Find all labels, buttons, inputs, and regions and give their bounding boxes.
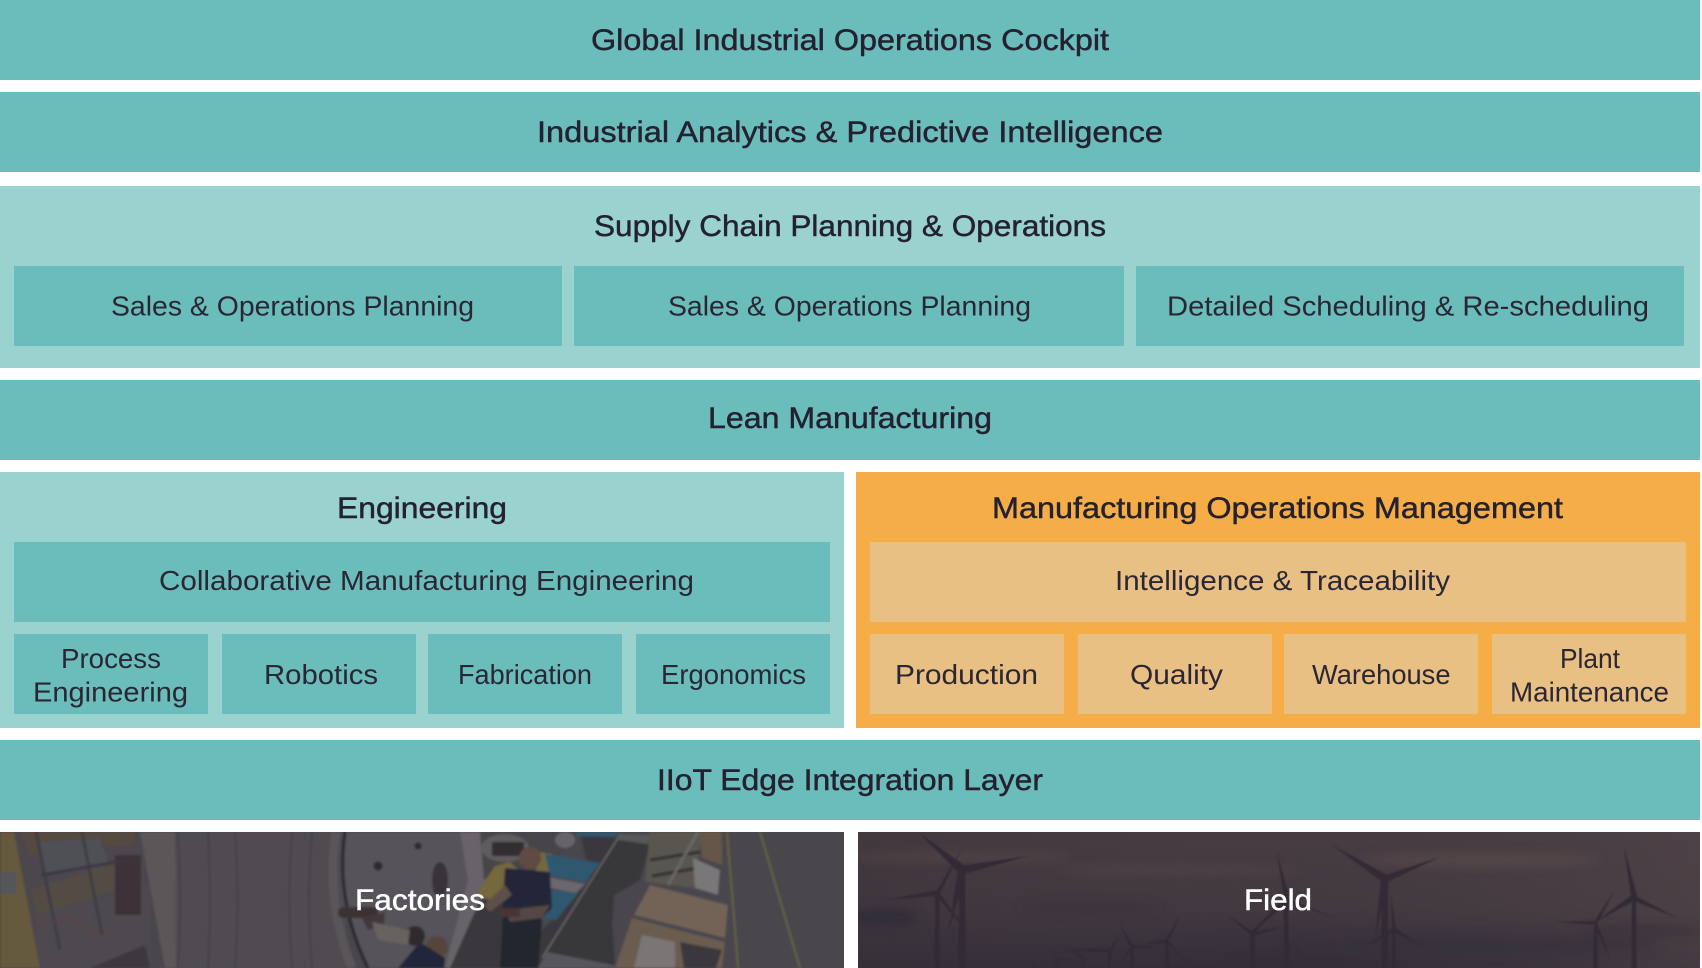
box: Warehouse: Warehouse <box>1312 659 1450 690</box>
heading: supply chain: Supply Chain Planning & Operations <box>594 210 1106 243</box>
box: Production: Production <box>895 659 1038 690</box>
label: Field: Field <box>1244 884 1312 917</box>
box: Production <box>870 634 1064 714</box>
bar: IIoT Edge Integration Layer <box>0 740 1700 820</box>
turbine 6 <box>1374 902 1409 954</box>
box: Process Engineering: Engineering <box>33 676 188 708</box>
box: Sales & Operations Planning (2) <box>574 266 1124 346</box>
heading: manufacturing operations management: Manufacturing Operations Management <box>992 492 1564 525</box>
box: Sales & Operations Planning (1): Sales & Operations Planning <box>111 290 474 322</box>
box: Process Engineering: Process <box>61 643 161 674</box>
box: Collaborative Manufacturing Engineering <box>14 542 830 622</box>
wind turbines <box>885 832 1677 968</box>
box: Quality: Quality <box>1130 659 1223 690</box>
box: Robotics <box>222 634 416 714</box>
bar: Lean Manufacturing <box>0 380 1700 460</box>
bar: Industrial Analytics & Predictive Intelligence: Industrial Analytics & Predictive Intelligence <box>537 116 1163 149</box>
turbine 2 <box>896 854 958 948</box>
box: Robotics: Robotics <box>264 659 378 690</box>
bar: IIoT Edge Integration Layer: IIoT Edge Integration Layer <box>657 764 1043 797</box>
box: Sales & Operations Planning (2): Sales & Operations Planning <box>668 290 1031 322</box>
panel: Supply Chain Planning & Operations <box>0 186 1700 368</box>
panel: Manufacturing Operations Management <box>856 472 1700 728</box>
box: Ergonomics <box>636 634 830 714</box>
box: Plant Maintenance <box>1492 634 1686 714</box>
box: Quality <box>1078 634 1272 714</box>
turbine 1 <box>922 834 1024 952</box>
turbine group small <box>1092 923 1176 954</box>
bar: Industrial Analytics & Predictive Intelligence <box>0 92 1700 172</box>
box: Plant Maintenance: Plant <box>1560 643 1620 674</box>
photo panel: Field <box>850 832 1702 968</box>
box: Sales & Operations Planning (1) <box>14 266 562 346</box>
heading: engineering: Engineering <box>337 492 507 525</box>
photo panel: Factories <box>0 832 844 968</box>
box: Ergonomics: Ergonomics <box>661 659 806 690</box>
sky streaks <box>858 854 1631 948</box>
box: Fabrication <box>428 634 622 714</box>
bar: Global Industrial Operations Cockpit: Global Industrial Operations Cockpit <box>591 24 1110 57</box>
bar: Global Industrial Operations Cockpit <box>0 0 1700 80</box>
bar: Lean Manufacturing: Lean Manufacturing <box>708 402 992 435</box>
turbine 5 <box>1337 848 1436 954</box>
box: Fabrication: Fabrication <box>458 659 592 690</box>
box: Warehouse <box>1284 634 1478 714</box>
label: Factories: Factories <box>355 884 485 917</box>
turbine 7 <box>1601 852 1672 968</box>
turbine 4 <box>1266 858 1322 952</box>
turbine 8 <box>1564 896 1612 968</box>
box: Detailed Scheduling & Re-scheduling: Detailed Scheduling & Re-scheduling <box>1167 290 1649 322</box>
box: Plant Maintenance: Maintenance <box>1510 676 1669 708</box>
box: Collaborative Manufacturing Engineering: Collaborative Manufacturing Engineering <box>159 565 694 596</box>
box: Intelligence & Traceability <box>870 542 1686 622</box>
box: Process Engineering <box>14 634 208 714</box>
panel: Engineering <box>0 472 844 728</box>
box: Intelligence & Traceability: Intelligence & Traceability <box>1115 565 1450 596</box>
turbine 3 <box>1236 922 1272 948</box>
box: Detailed Scheduling & Re-scheduling <box>1136 266 1684 346</box>
